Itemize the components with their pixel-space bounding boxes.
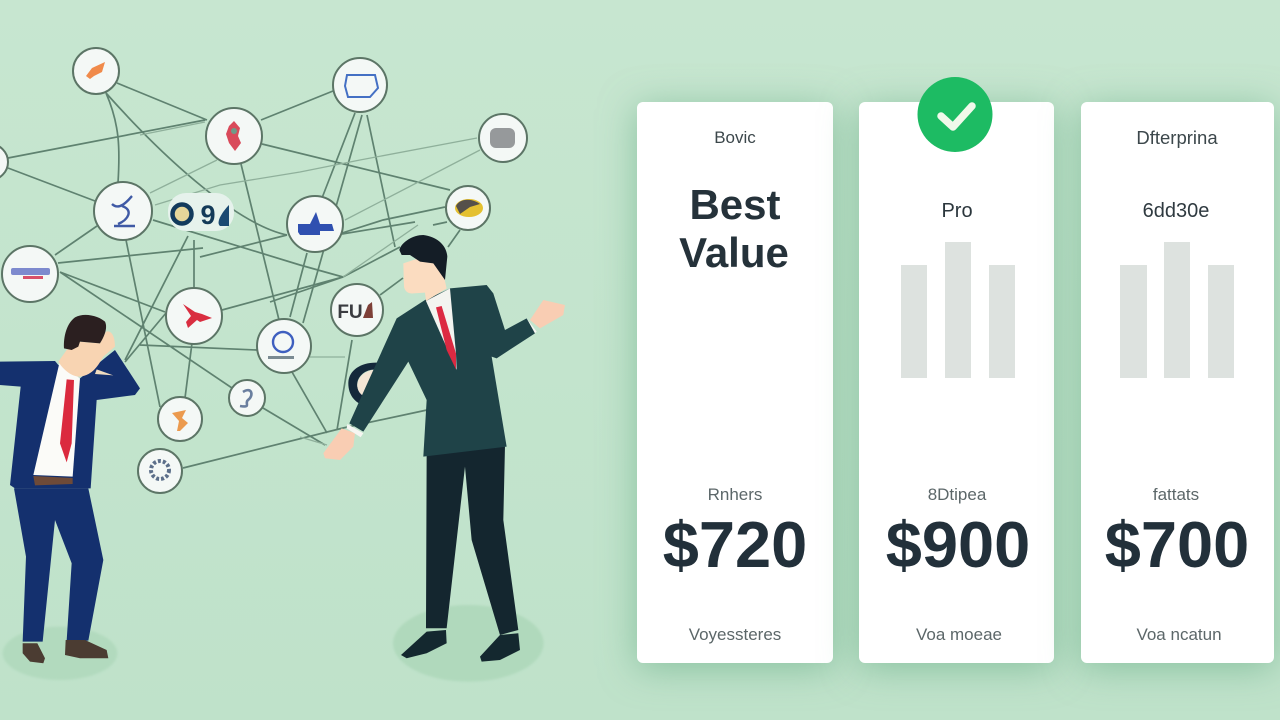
cuffs bbox=[347, 318, 537, 437]
node: FU lettering bbox=[331, 284, 383, 336]
belt bbox=[33, 476, 73, 485]
node: blue knot bbox=[229, 380, 265, 416]
node: blue speech bubble bbox=[333, 58, 387, 112]
card background: Basic bbox=[637, 102, 833, 663]
dark ring behind arm bbox=[348, 363, 378, 404]
hair bbox=[64, 315, 106, 350]
node: dark lettering badge: 9 bbox=[200, 200, 216, 230]
footer label: Voyessteres bbox=[689, 625, 781, 644]
skin under arm bbox=[95, 369, 113, 375]
trousers bbox=[14, 488, 103, 642]
node: grey cluster bbox=[479, 114, 527, 162]
node: dark lettering badge bbox=[168, 193, 234, 231]
jacket bbox=[349, 285, 535, 457]
node: red leaves bbox=[166, 288, 222, 344]
hair bbox=[399, 235, 447, 280]
neck and face bbox=[403, 253, 447, 301]
ground shadow: worried man bbox=[3, 627, 117, 680]
node: orange figure bbox=[158, 397, 202, 441]
node: blue label bbox=[2, 246, 58, 302]
node: left edge bbox=[0, 144, 8, 180]
bar chart: Enterprise bbox=[1120, 242, 1234, 378]
jacket bbox=[0, 350, 140, 488]
pricing card: Enterprise bbox=[1081, 102, 1274, 663]
bar chart: Pro bbox=[901, 242, 1015, 378]
icon: green check badge bbox=[918, 77, 992, 152]
price: $720: $720 bbox=[663, 508, 807, 581]
shoes bbox=[23, 640, 108, 663]
footer label: Voa ncatun bbox=[1136, 625, 1222, 644]
node: red flower bbox=[206, 108, 262, 164]
node: grey floral bbox=[138, 449, 182, 493]
node: blue squiggle bbox=[94, 182, 152, 240]
pricing card: Pro bbox=[859, 102, 1054, 663]
sub name: 6dd30e bbox=[1143, 200, 1209, 222]
worried man in navy suit bbox=[0, 315, 140, 680]
confident man in dark green suit bbox=[323, 235, 565, 682]
face and hand bbox=[58, 331, 115, 377]
shirt bbox=[33, 363, 80, 477]
node: orange bird bbox=[73, 48, 119, 94]
footer label: Voa moeae bbox=[916, 625, 1002, 644]
hand left bbox=[323, 428, 355, 460]
pale disc behind arm bbox=[357, 369, 378, 397]
plan name: Enterprise: Dfterprina bbox=[1136, 127, 1218, 148]
node: blue building bbox=[287, 196, 343, 252]
label above price: Rnhers bbox=[708, 485, 762, 504]
ground shadow: confident man bbox=[393, 605, 544, 682]
network connection lines bbox=[8, 83, 480, 468]
node: blue globe bbox=[257, 319, 311, 373]
price: $700: $700 bbox=[1105, 508, 1249, 581]
pricing card: Basic bbox=[637, 102, 833, 663]
node: yellow badge bbox=[446, 186, 490, 230]
heading: Best Value: Value bbox=[679, 229, 789, 276]
shirt bbox=[426, 288, 457, 370]
card background: Pro bbox=[859, 102, 1054, 663]
label above price: 8Dtipea bbox=[928, 485, 987, 504]
node: FU lettering: FU bbox=[337, 302, 363, 323]
label above price: fattats bbox=[1153, 485, 1199, 504]
tie bbox=[436, 306, 456, 369]
tie bbox=[60, 379, 74, 462]
hand right bbox=[530, 300, 565, 328]
trousers bbox=[426, 447, 518, 635]
shoes bbox=[401, 630, 520, 662]
heading: Best Value: Best bbox=[689, 181, 781, 228]
plan name: Pro: Pro bbox=[941, 200, 973, 222]
price: $900: $900 bbox=[886, 508, 1030, 581]
plan name: Basic: Bovic bbox=[714, 128, 756, 147]
card background: Enterprise bbox=[1081, 102, 1274, 663]
